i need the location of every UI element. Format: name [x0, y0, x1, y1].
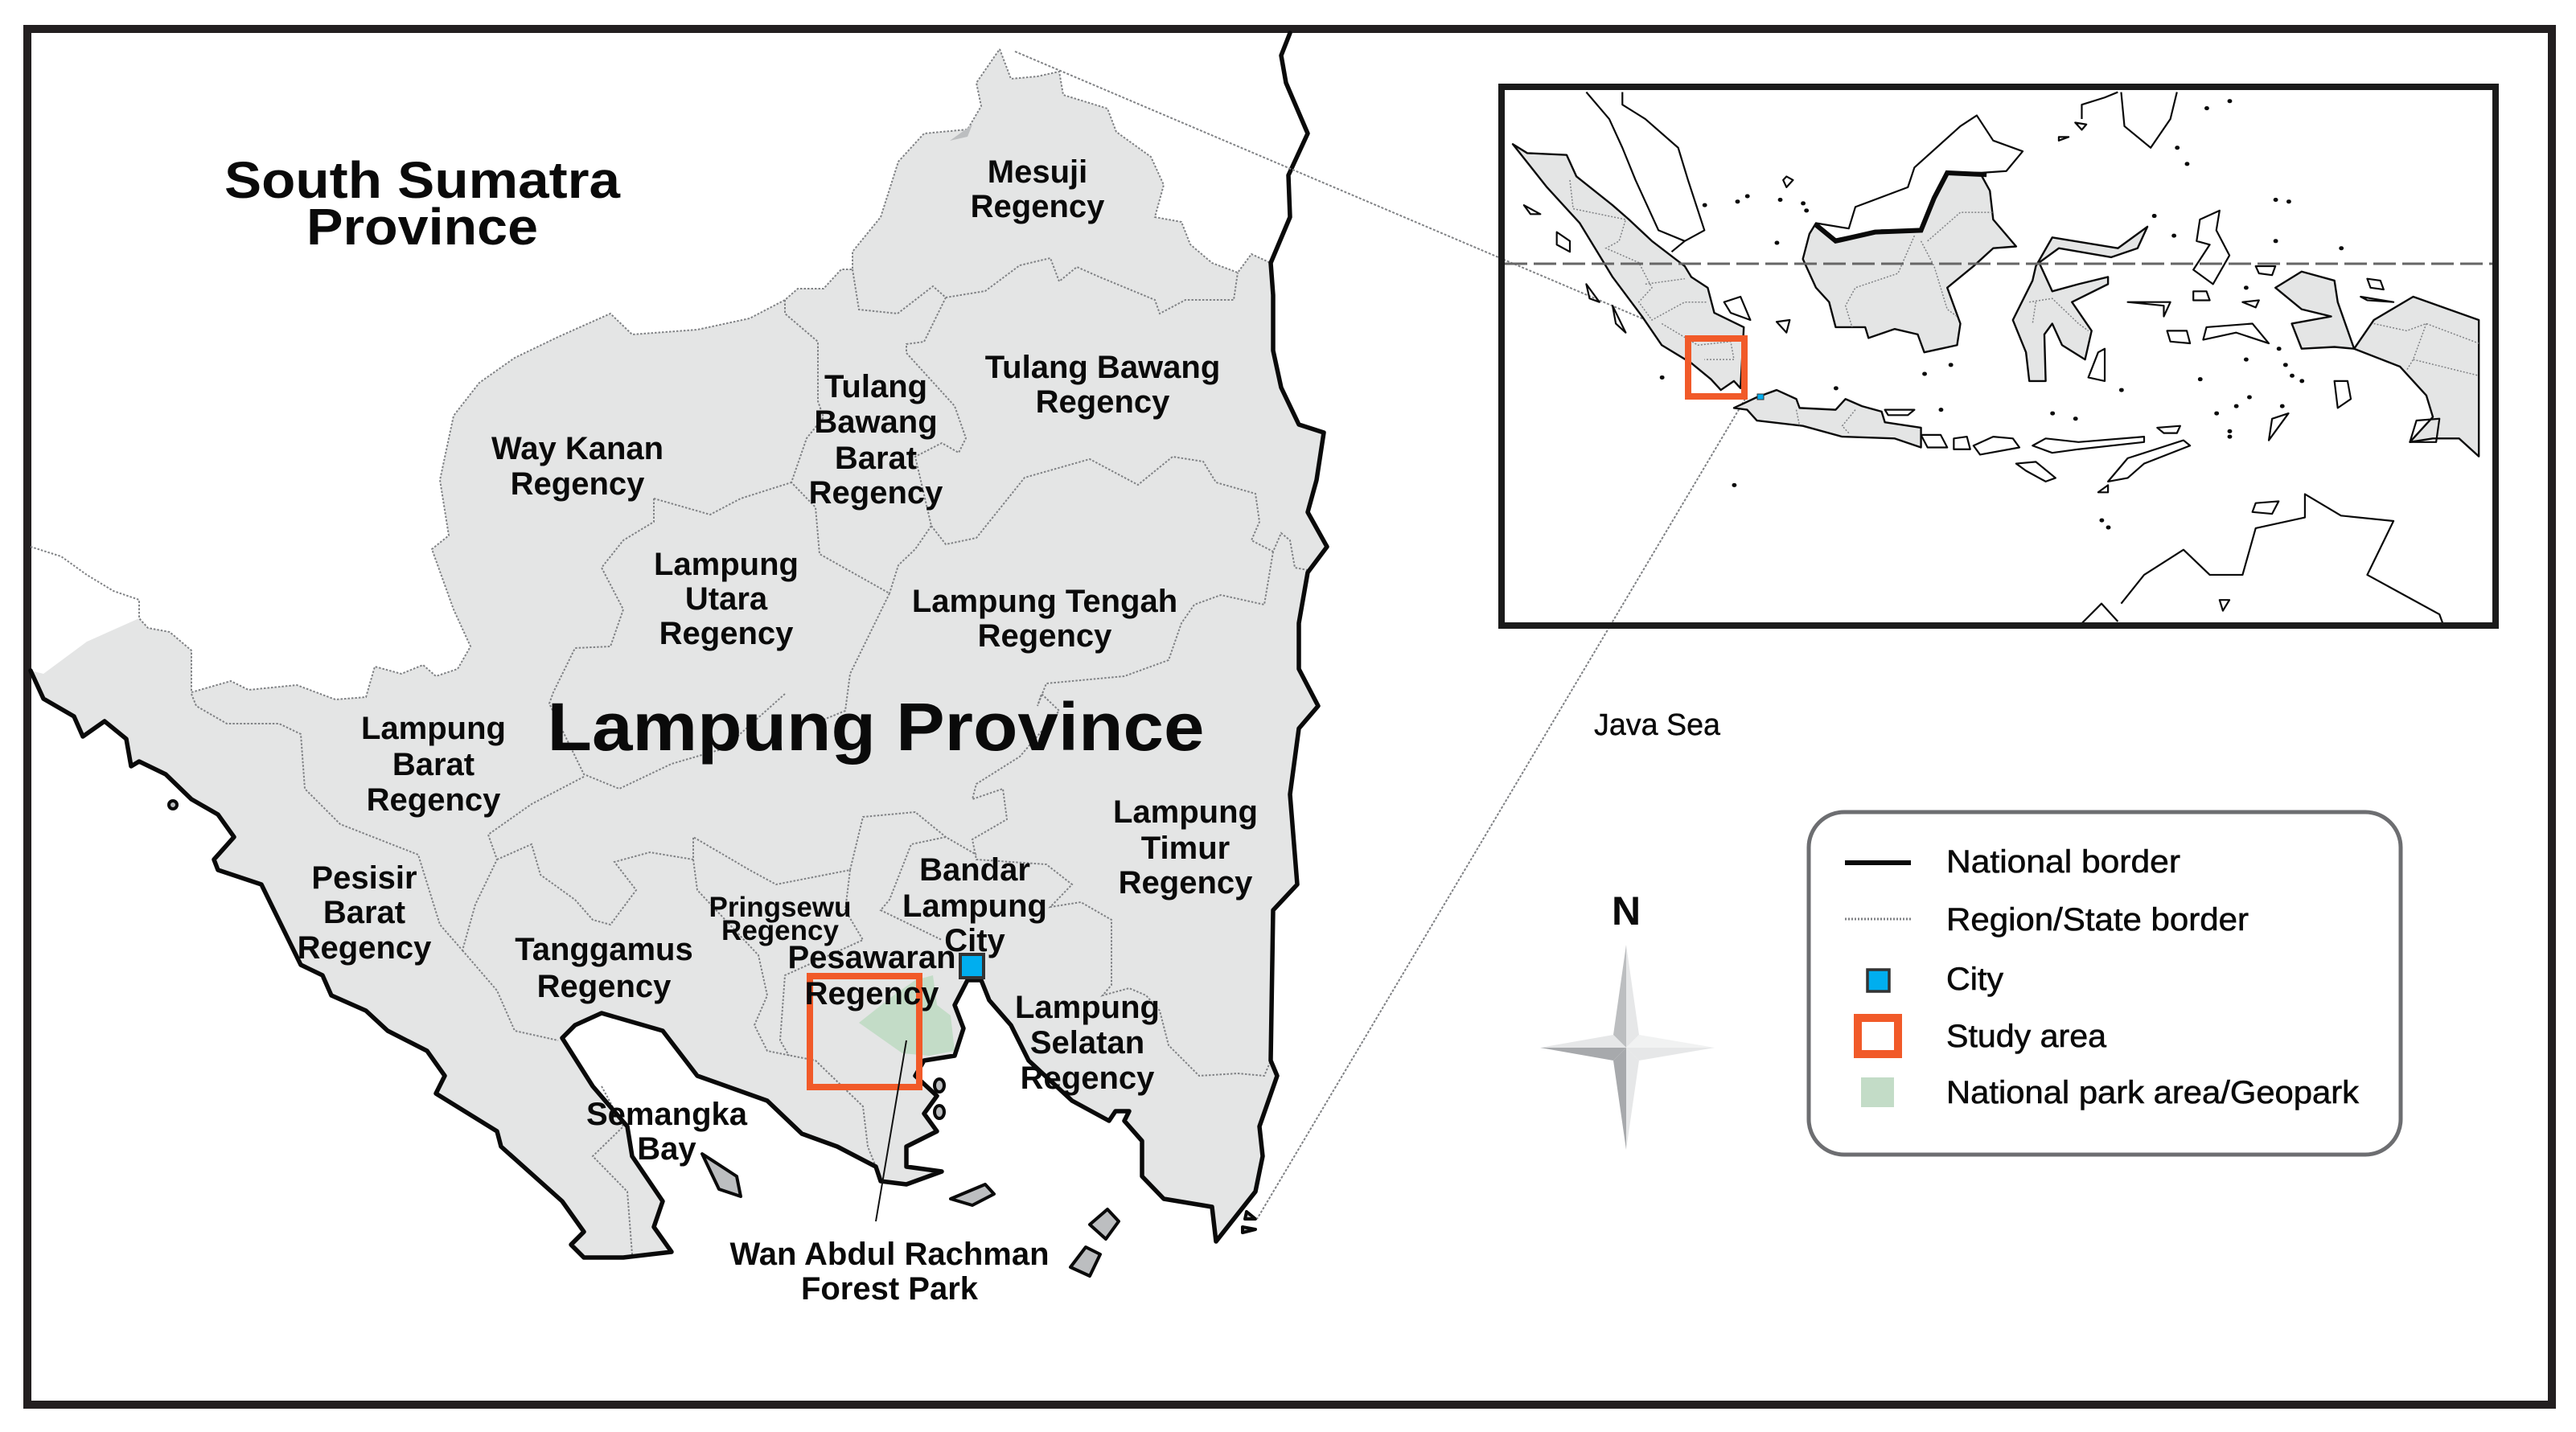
Java	[1734, 390, 1921, 447]
label: Lampung Timur Regency: Lampung	[1113, 794, 1258, 830]
label: Tanggamus Regency: Tanggamus	[515, 932, 693, 967]
label: Pesisir Barat Regency: Barat	[323, 895, 405, 930]
label: Lampung Timur Regency: Regency	[1119, 865, 1253, 901]
label: Lampung Barat Regency: Regency	[367, 782, 501, 818]
Sulawesi	[2013, 227, 2147, 381]
national border: coastline	[31, 33, 1327, 1258]
label: Bandar Lampung City: Bandar	[919, 852, 1030, 888]
label: Pesisir Barat Regency: Regency	[298, 930, 432, 966]
panel: legend	[1809, 812, 2401, 1155]
legend item: study area	[1858, 1018, 2107, 1054]
label: Mesuji Regency: Mesuji	[988, 154, 1087, 190]
label: Lampung Selatan Regency: Selatan	[1030, 1025, 1144, 1061]
label: Tulang Bawang Regency: Regency	[1036, 384, 1170, 420]
label: Lampung Timur Regency: Timur	[1141, 831, 1230, 866]
compass letter N: N	[1612, 888, 1641, 933]
label: Pesawaran Regency: Pesawaran	[787, 940, 956, 975]
legend item: city: City	[1946, 962, 2003, 997]
label: Way Kanan Regency: Regency	[511, 466, 645, 502]
label: Lampung Tengah Regency: Lampung Tengah	[912, 584, 1177, 619]
label: Bandar Lampung City: Lampung	[902, 888, 1047, 924]
provincial borders	[1570, 180, 2479, 433]
Papua	[2354, 297, 2479, 457]
Sumatra	[1513, 144, 1744, 390]
heading: Lampung Province: Lampung Province	[547, 689, 1205, 765]
label: Pesisir Barat Regency: Pesisir	[311, 860, 417, 896]
label: Semangka Bay: Semangka	[586, 1097, 748, 1132]
Kalimantan	[1803, 173, 2016, 352]
label: Lampung Tengah Regency: Regency	[978, 618, 1112, 654]
legend item: national park area: National park area/Geopark	[1946, 1075, 2360, 1110]
inset geography	[1505, 92, 2493, 623]
legend item: region/state border: Region/State border	[1946, 902, 2249, 938]
region borders	[31, 49, 1308, 1254]
city marker: Bandar Lampung	[960, 954, 984, 978]
compass star	[1540, 945, 1715, 1150]
legend box	[1809, 812, 2401, 1155]
inset study area square	[1688, 339, 1744, 396]
label: Pesawaran Regency: Regency	[805, 976, 939, 1011]
label: Tulang Bawang Barat Regency: Barat	[835, 441, 917, 476]
label: Lampung Barat Regency: Lampung	[361, 711, 506, 746]
label: Semangka Bay: Bay	[637, 1131, 696, 1167]
label: Bandar Lampung City: City	[944, 923, 1006, 958]
connector lines to inset	[1015, 51, 1745, 1219]
leader line: forest park	[876, 1040, 906, 1221]
label: Tulang Bawang Barat Regency: Tulang	[824, 369, 927, 404]
national park area	[859, 975, 955, 1056]
inset frame	[1502, 87, 2496, 626]
label: Mesuji Regency: Regency	[971, 189, 1105, 224]
legend item: study area: Study area	[1946, 1019, 2107, 1054]
inset city marker	[1757, 394, 1764, 400]
heading: South Sumatra Province: Province	[306, 198, 538, 256]
legend item: city	[1867, 962, 2003, 997]
label: Lampung Utara Regency: Utara	[685, 581, 768, 617]
panel: Lampung main map	[31, 33, 1327, 1276]
label: Pringsewu Regency: Regency	[721, 915, 839, 946]
label: Lampung Utara Regency: Regency	[659, 616, 794, 651]
label: Tulang Bawang Regency: Tulang Bawang	[985, 350, 1220, 385]
label: Lampung Selatan Regency: Lampung	[1015, 990, 1160, 1025]
legend item: national border: National border	[1946, 844, 2180, 880]
label: Pringsewu Regency: Pringsewu	[709, 892, 851, 923]
other coastlines and islands	[1524, 92, 2442, 623]
equator line	[1505, 262, 2493, 265]
label: Tulang Bawang Barat Regency: Regency	[809, 475, 943, 511]
label: Wan Abdul Rachman Forest Park: Wan Abdul Rachman	[729, 1237, 1050, 1272]
label: Java Sea: Java Sea	[1594, 708, 1721, 742]
land: Lampung Province	[31, 49, 1327, 1258]
compass: north arrow	[1540, 888, 1715, 1150]
label: Wan Abdul Rachman Forest Park: Forest Park	[801, 1271, 979, 1307]
label: Lampung Utara Regency: Lampung	[654, 547, 799, 582]
label: Tanggamus Regency: Regency	[537, 969, 672, 1004]
small islands	[169, 125, 1255, 1276]
label: Tulang Bawang Barat Regency: Bawang	[814, 404, 938, 440]
heading: South Sumatra Province: South Sumatra	[224, 151, 620, 209]
label: Lampung Selatan Regency: Regency	[1021, 1061, 1155, 1096]
Borneo north national border	[1816, 173, 1986, 241]
label: Way Kanan Regency: Way Kanan	[491, 431, 664, 466]
panel: Indonesia inset map	[1502, 87, 2496, 626]
Bird's Head and Halmahera side	[2275, 272, 2354, 349]
study area square	[810, 976, 919, 1087]
label: Lampung Barat Regency: Barat	[392, 747, 475, 782]
